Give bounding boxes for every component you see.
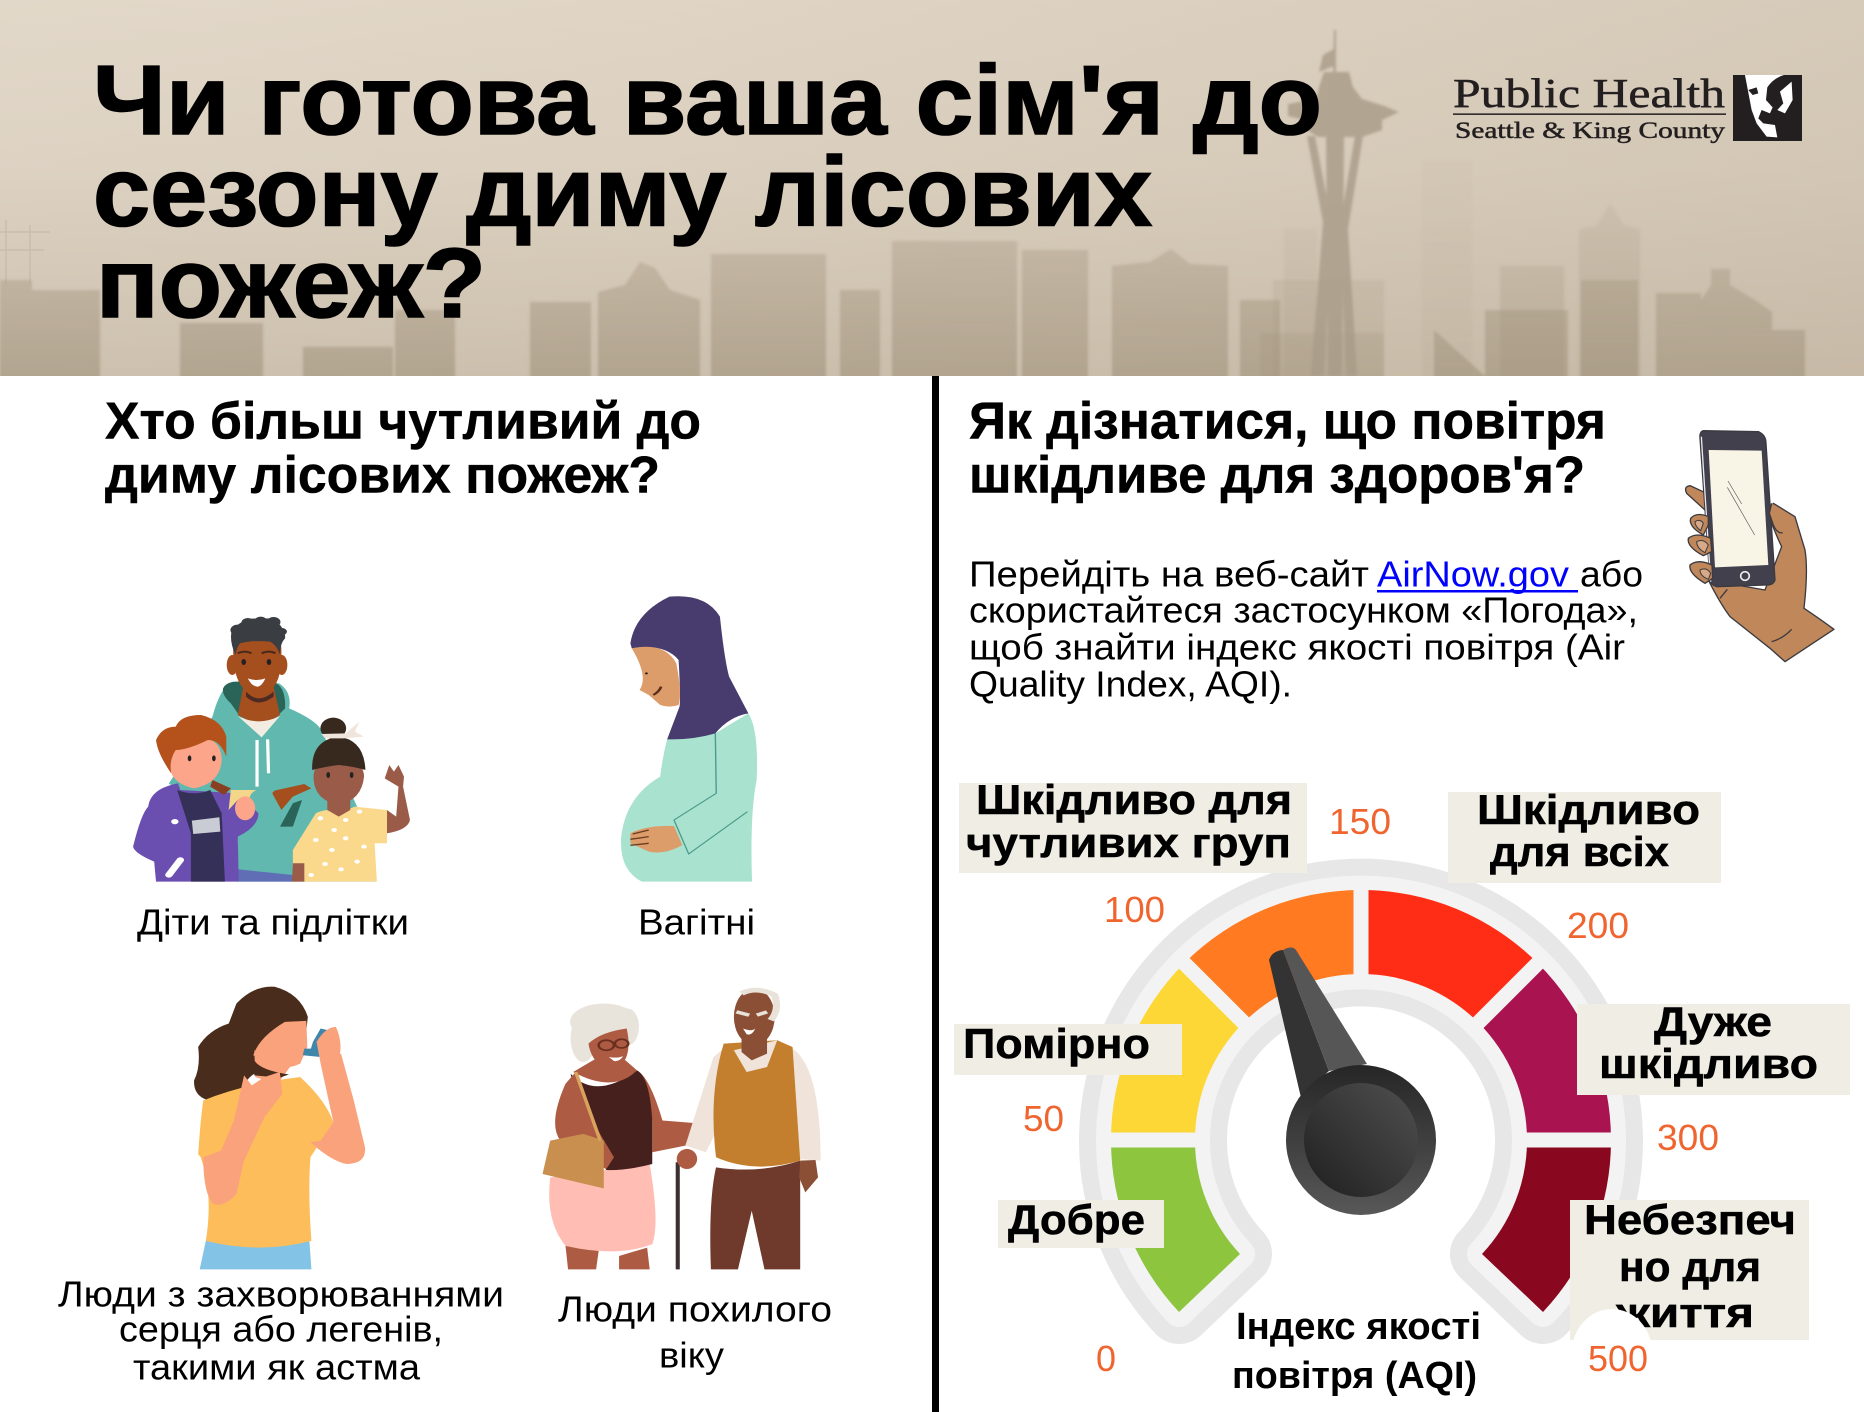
heading: who is more sensitive: Хто більш чутливий до <box>105 392 701 450</box>
label: people with heart or lung disease <box>58 1274 504 1388</box>
label: very unhealthy <box>1577 998 1850 1095</box>
heading: how to know <box>969 392 1606 504</box>
logo: Public Health Seattle & King County: Public Health <box>1453 70 1725 116</box>
scale numbers: ends: 0 <box>1096 1338 1116 1379</box>
segment: good (green) <box>1111 1140 1240 1312</box>
label: elderly people: Люди похилого <box>558 1288 832 1330</box>
gauge caption: Індекс якості <box>1236 1306 1481 1348</box>
label: very unhealthy: шкідливо <box>1599 1040 1818 1087</box>
text block: AirNow instructions <box>969 554 1643 704</box>
label: hazardous to life: Небезпеч <box>1584 1196 1796 1243</box>
label: unhealthy for sensitive groups <box>959 776 1307 873</box>
title: пожеж? <box>96 228 486 338</box>
label: elderly people: віку <box>659 1334 724 1376</box>
scale numbers: 100 <box>1104 889 1165 930</box>
label: pregnant: Вагітні <box>638 902 755 942</box>
header banner: smoky Seattle skyline <box>0 0 1864 385</box>
label: unhealthy for sensitive groups: Шкідливо для <box>976 776 1292 823</box>
label: unhealthy for everyone <box>1448 786 1721 883</box>
scale numbers: 200 <box>1567 905 1629 946</box>
label: unhealthy for sensitive groups: чутливих груп <box>966 819 1291 866</box>
label: people with heart or lung disease: Люди з захворюваннями <box>58 1274 504 1314</box>
label: elderly people <box>558 1288 832 1376</box>
text block: AirNow instructions: Quality Index, AQI). <box>969 664 1292 704</box>
text block: AirNow instructions: AirNow.gov <box>1377 554 1569 594</box>
panel: how to know the air is harmful <box>954 392 1850 1397</box>
segment: moderate (yellow) <box>1111 963 1244 1140</box>
text block: AirNow instructions: скористайтеся застосунком «Погода», <box>969 590 1638 630</box>
scale numbers: 50 <box>1023 1098 1064 1139</box>
heading: how to know: шкідливе для здоров'я? <box>969 446 1585 504</box>
logo: Public Health Seattle & King County <box>1453 70 1802 143</box>
segment: hazardous (dark red) <box>1482 1140 1611 1312</box>
icon: elderly couple <box>543 988 821 1269</box>
title <box>93 45 1322 338</box>
heading: who is more sensitive <box>105 392 701 504</box>
Space Needle <box>1288 30 1399 376</box>
label: children and teens: Діти та підлітки <box>137 902 409 942</box>
label: hazardous to life <box>1570 1196 1809 1395</box>
panel: who is more sensitive <box>58 392 832 1388</box>
label: good: Добре <box>1008 1196 1145 1243</box>
title: Чи готова ваша сім'я до <box>93 45 1322 155</box>
label: hazardous to life: но для <box>1619 1243 1761 1290</box>
heading: who is more sensitive: диму лісових пожеж? <box>105 446 660 504</box>
icon: woman using asthma inhaler <box>194 987 365 1269</box>
label: people with heart or lung disease: серця або легенів, <box>119 1308 443 1350</box>
label: unhealthy for everyone: для всіх <box>1490 828 1670 875</box>
text block: AirNow instructions: Перейдіть на веб-сайт <box>969 554 1369 594</box>
scale numbers: ends <box>1096 1338 1648 1379</box>
icon: pregnant woman <box>621 596 757 882</box>
icon: family with children and teens <box>133 617 410 882</box>
scale numbers <box>1023 801 1719 1158</box>
label: hazardous to life: життя <box>1615 1289 1754 1336</box>
label: people with heart or lung disease: такими як астма <box>133 1346 421 1388</box>
segment: unhealthy (red) <box>1361 890 1538 1023</box>
label: unhealthy for everyone: Шкідливо <box>1477 786 1700 833</box>
label: very unhealthy: Дуже <box>1654 998 1772 1045</box>
gauge caption: повітря (AQI) <box>1232 1355 1477 1397</box>
segment: very unhealthy (magenta) <box>1478 963 1611 1140</box>
scale numbers: ends: 500 <box>1588 1338 1648 1379</box>
scale numbers: 150 <box>1329 801 1391 842</box>
heading: how to know: Як дізнатися, що повітря <box>969 392 1606 450</box>
gauge caption <box>1232 1306 1481 1397</box>
icon: hand holding phone <box>1686 431 1834 662</box>
label: moderate: Помірно <box>963 1020 1150 1067</box>
logo: Public Health Seattle & King County: Seattle & King County <box>1455 118 1726 143</box>
label: moderate <box>954 1020 1182 1075</box>
title: сезону диму лісових <box>93 136 1152 246</box>
scale numbers: 300 <box>1657 1117 1719 1158</box>
needle <box>1269 948 1436 1215</box>
segment: unhealthy for sensitive groups (orange) <box>1184 890 1361 1023</box>
chart: AQI gauge <box>954 776 1850 1397</box>
text block: AirNow instructions: або <box>1580 554 1643 594</box>
divider between panels <box>932 376 939 1412</box>
text block: AirNow instructions: щоб знайти індекс якості повітря (Air <box>969 626 1625 668</box>
gauge background horseshoe <box>1111 891 1611 1312</box>
